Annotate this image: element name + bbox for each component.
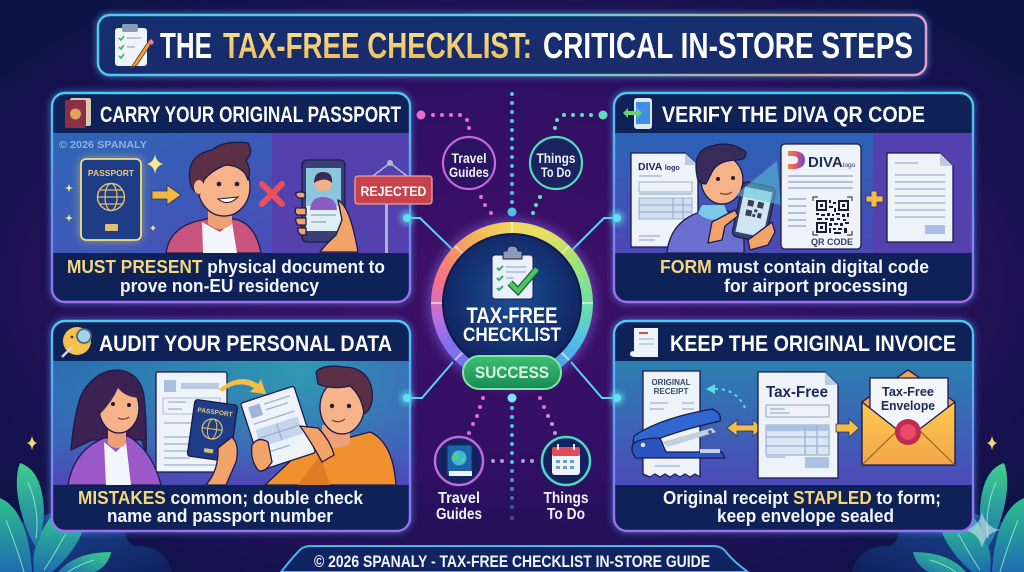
caption: prove non-EU residency — [120, 276, 319, 296]
watermark: © 2026 SPANALY — [59, 139, 147, 151]
qr document: logo — [843, 162, 856, 169]
connector nodes — [400, 211, 624, 405]
link circle: travel guides top: Guides — [449, 165, 489, 180]
form with diva logo — [631, 153, 698, 247]
panel: carry your original passport — [52, 93, 432, 302]
green dotted path — [531, 110, 608, 215]
receipt: RECEIPT — [654, 387, 688, 396]
qr document — [735, 144, 861, 249]
link circle: things to do bottom — [542, 437, 590, 523]
small arrow — [836, 419, 859, 437]
link circle: travel guides top — [443, 137, 495, 189]
form with diva logo: DIVA logo — [638, 161, 680, 173]
caption: MUST PRESENT physical document to — [67, 257, 385, 277]
icon: passport — [65, 98, 91, 128]
icon: scroll invoice — [630, 328, 658, 357]
rejected sign: REJECTED — [360, 183, 426, 199]
receipt — [643, 371, 700, 477]
woman — [68, 370, 161, 485]
caption: FORM must contain digital code — [660, 257, 929, 277]
caption: Original receipt STAPLED to form; — [663, 488, 941, 508]
dashed teal arrow — [706, 384, 745, 408]
heading: AUDIT YOUR PERSONAL DATA — [99, 331, 392, 356]
icon: calendar — [552, 444, 580, 475]
curved arrow — [219, 379, 266, 394]
qr document: DIVA — [808, 154, 843, 171]
icon: clipboard with check — [492, 246, 537, 299]
link circle: travel guides bottom: Guides — [436, 506, 482, 523]
footer banner — [281, 546, 748, 572]
caption — [78, 488, 364, 526]
hub label: TAX-FREE — [466, 303, 558, 328]
link circle: travel guides bottom — [435, 437, 483, 523]
man checking phone — [667, 144, 776, 253]
lower dotted paths — [491, 396, 557, 463]
tilted form held — [241, 386, 334, 471]
man in orange — [265, 366, 396, 485]
link circle: travel guides bottom: Travel — [438, 490, 480, 507]
link circle: things to do bottom: Things — [544, 490, 588, 507]
success pill: SUCCESS — [475, 363, 549, 382]
hub disc — [443, 234, 581, 372]
blank document — [887, 153, 953, 242]
panel: audit your personal data — [52, 321, 410, 531]
caption — [663, 488, 941, 526]
icon: book with globe — [447, 445, 472, 476]
heading: CARRY YOUR ORIGINAL PASSPORT — [100, 102, 401, 127]
passport illustration — [81, 159, 141, 240]
receipt: ORIGINAL — [651, 378, 691, 387]
left corner foliage — [0, 463, 172, 572]
passport illustration: PASSPORT — [88, 168, 135, 178]
rejected sign — [355, 160, 432, 253]
caption — [660, 257, 929, 296]
title banner — [98, 15, 926, 75]
arrow — [152, 185, 181, 205]
envelope: Envelope — [881, 398, 935, 413]
caption — [67, 257, 385, 296]
heading: VERIFY THE DIVA QR CODE — [662, 102, 925, 127]
sparkle right — [987, 436, 997, 450]
title text: TAX-FREE CHECKLIST: — [223, 25, 532, 66]
panel: keep the original invoice — [614, 321, 973, 531]
pink dotted path — [416, 110, 493, 435]
panel: verify the diva qr code — [614, 93, 973, 302]
title text — [160, 25, 913, 66]
icon: clipboard with pencil — [115, 24, 154, 68]
tax-free form — [758, 372, 838, 478]
central vertical dotted line — [508, 92, 516, 520]
success pill — [463, 356, 561, 389]
link circle: things to do top — [530, 137, 582, 189]
red cross — [262, 184, 282, 204]
right corner foliage — [852, 463, 1024, 572]
ring ticks — [431, 222, 593, 360]
caption: for airport processing — [724, 276, 908, 296]
stapler — [632, 409, 725, 458]
footer banner: © 2026 SPANALY - TAX-FREE CHECKLIST IN-STORE GUIDE — [314, 553, 710, 571]
sparkles — [65, 154, 163, 231]
heading: KEEP THE ORIGINAL INVOICE — [670, 331, 956, 356]
caption: keep envelope sealed — [717, 506, 894, 526]
phone in hand — [295, 160, 358, 252]
sparkle left — [27, 436, 37, 450]
qr code — [813, 197, 852, 235]
tax-free form: Tax-Free — [766, 384, 828, 401]
center hub — [428, 219, 596, 389]
link circle: things to do bottom: To Do — [547, 506, 585, 523]
connectors — [407, 218, 617, 398]
envelope — [862, 370, 955, 465]
passport in hand: PASSPORT — [197, 407, 233, 419]
plus sign — [866, 191, 883, 207]
link circle: travel guides top: Travel — [452, 151, 486, 166]
hub label: CHECKLIST — [463, 325, 561, 346]
title text: CRITICAL IN-STORE STEPS — [543, 25, 913, 66]
caption: MISTAKES common; double check — [78, 488, 364, 508]
link circle: things to do top: Things — [536, 151, 576, 166]
passport in hand — [187, 399, 238, 485]
man with pink jacket — [166, 142, 261, 253]
link circle: things to do top: To Do — [541, 165, 571, 180]
watermark star — [964, 512, 1000, 548]
diva logo mark — [788, 151, 805, 169]
icon: face with magnifier — [62, 327, 91, 357]
title text: THE — [160, 25, 212, 66]
hub label — [463, 303, 561, 346]
personal data form — [156, 372, 227, 472]
envelope: Tax-Free — [882, 384, 934, 399]
qr document: QR CODE — [811, 237, 853, 247]
caption: name and passport number — [107, 506, 333, 526]
double arrow — [727, 420, 763, 436]
icon: phone with arrows — [623, 98, 652, 129]
rainbow ring — [431, 222, 593, 384]
